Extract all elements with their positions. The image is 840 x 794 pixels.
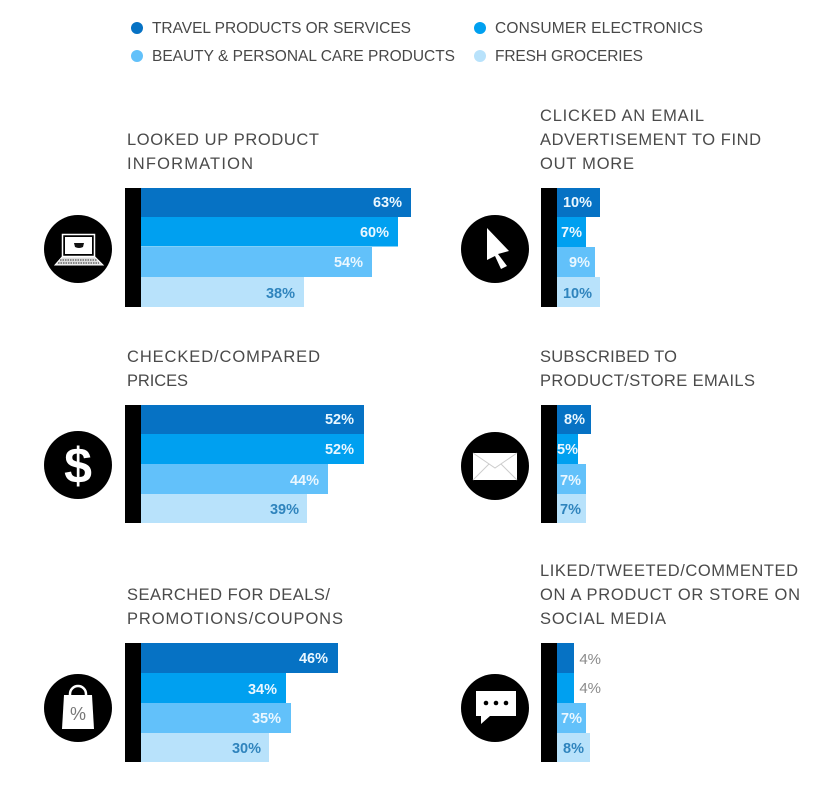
heading: searched for deals: SEARCHED FOR DEALS/: [127, 586, 330, 604]
bar chart: [541, 405, 591, 523]
bar chart: 46%: [299, 651, 328, 667]
icon: speech bubble: [461, 674, 529, 742]
icon: shopping bag: [44, 674, 112, 742]
bar chart: [125, 405, 364, 523]
bar chart: 38%: [266, 286, 295, 302]
heading: liked/tweeted/commented: ON A PRODUCT OR STORE ON: [540, 586, 800, 604]
icon: shopping bag: %: [70, 704, 86, 724]
bar chart: 10%: [563, 195, 592, 211]
bar chart: [125, 188, 411, 307]
heading: checked/compared prices: [127, 348, 320, 390]
heading: looked up product information: LOOKED UP PRODUCT: [127, 131, 319, 149]
bar chart: 8%: [564, 412, 585, 428]
bar chart: 63%: [373, 195, 402, 211]
bar chart: 4%: [579, 680, 601, 697]
bar chart: 5%: [557, 442, 578, 458]
heading: subscribed to product/store emails: PRODUCT/STORE EMAILS: [540, 372, 755, 390]
icon: laptop: [44, 215, 112, 283]
panel: looked up product information: [44, 131, 411, 307]
legend: [131, 20, 703, 65]
icon: dollar sign: [44, 431, 112, 499]
heading: looked up product information: INFORMATION: [127, 155, 253, 173]
icon: cursor: [461, 215, 529, 283]
bar chart: 34%: [248, 682, 277, 698]
bar chart: 8%: [563, 741, 584, 757]
heading: liked/tweeted/commented: SOCIAL MEDIA: [540, 610, 666, 628]
panel: checked/compared prices: [44, 348, 364, 523]
bar chart: [541, 643, 601, 762]
heading: searched for deals: PROMOTIONS/COUPONS: [127, 610, 343, 628]
heading: checked/compared prices: CHECKED/COMPARED: [127, 348, 320, 366]
panel: searched for deals/promotions/coupons: [44, 586, 343, 762]
heading: subscribed to product/store emails: SUBSCRIBED TO: [540, 348, 677, 366]
heading: clicked an email advertisement: ADVERTISEMENT TO FIND: [540, 131, 761, 149]
heading: checked/compared prices: PRICES: [127, 372, 188, 390]
heading: looked up product information: [127, 131, 319, 173]
bar chart: 9%: [569, 255, 590, 271]
bar chart: 52%: [325, 442, 354, 458]
heading: clicked an email advertisement: OUT MORE: [540, 155, 634, 173]
bar chart: 30%: [232, 741, 261, 757]
bar chart: 54%: [334, 255, 363, 271]
bar chart: 52%: [325, 412, 354, 428]
bar chart: 44%: [290, 473, 319, 489]
bar chart: [541, 188, 600, 307]
heading: liked/tweeted/commented: LIKED/TWEETED/COMMENTED: [540, 562, 798, 580]
heading: searched for deals: [127, 586, 343, 628]
bar chart: 7%: [560, 473, 581, 489]
legend: TRAVEL PRODUCTS OR SERVICES: [152, 20, 411, 37]
heading: clicked an email advertisement: [540, 107, 761, 173]
bar chart: [125, 643, 338, 762]
heading: subscribed to product/store emails: [540, 348, 755, 390]
icon: dollar sign: $: [64, 438, 92, 494]
icon: envelope: [461, 432, 529, 500]
heading: liked/tweeted/commented: [540, 562, 800, 628]
bar chart: 60%: [360, 225, 389, 241]
bar chart: 4%: [579, 651, 601, 668]
legend: BEAUTY & PERSONAL CARE PRODUCTS: [152, 48, 455, 65]
legend: CONSUMER ELECTRONICS: [495, 20, 703, 37]
panel: clicked an email advertisement: [461, 107, 761, 307]
panel: liked/tweeted/commented on social media: [461, 562, 800, 762]
bar chart: 7%: [561, 225, 582, 241]
bar chart: 7%: [560, 502, 581, 518]
bar chart: 39%: [270, 502, 299, 518]
legend: FRESH GROCERIES: [495, 48, 643, 65]
bar chart: 7%: [561, 711, 582, 727]
heading: clicked an email advertisement: CLICKED AN EMAIL: [540, 107, 704, 125]
bar chart: 35%: [252, 711, 281, 727]
bar chart: 10%: [563, 286, 592, 302]
panel: subscribed to product/store emails: [461, 348, 755, 523]
